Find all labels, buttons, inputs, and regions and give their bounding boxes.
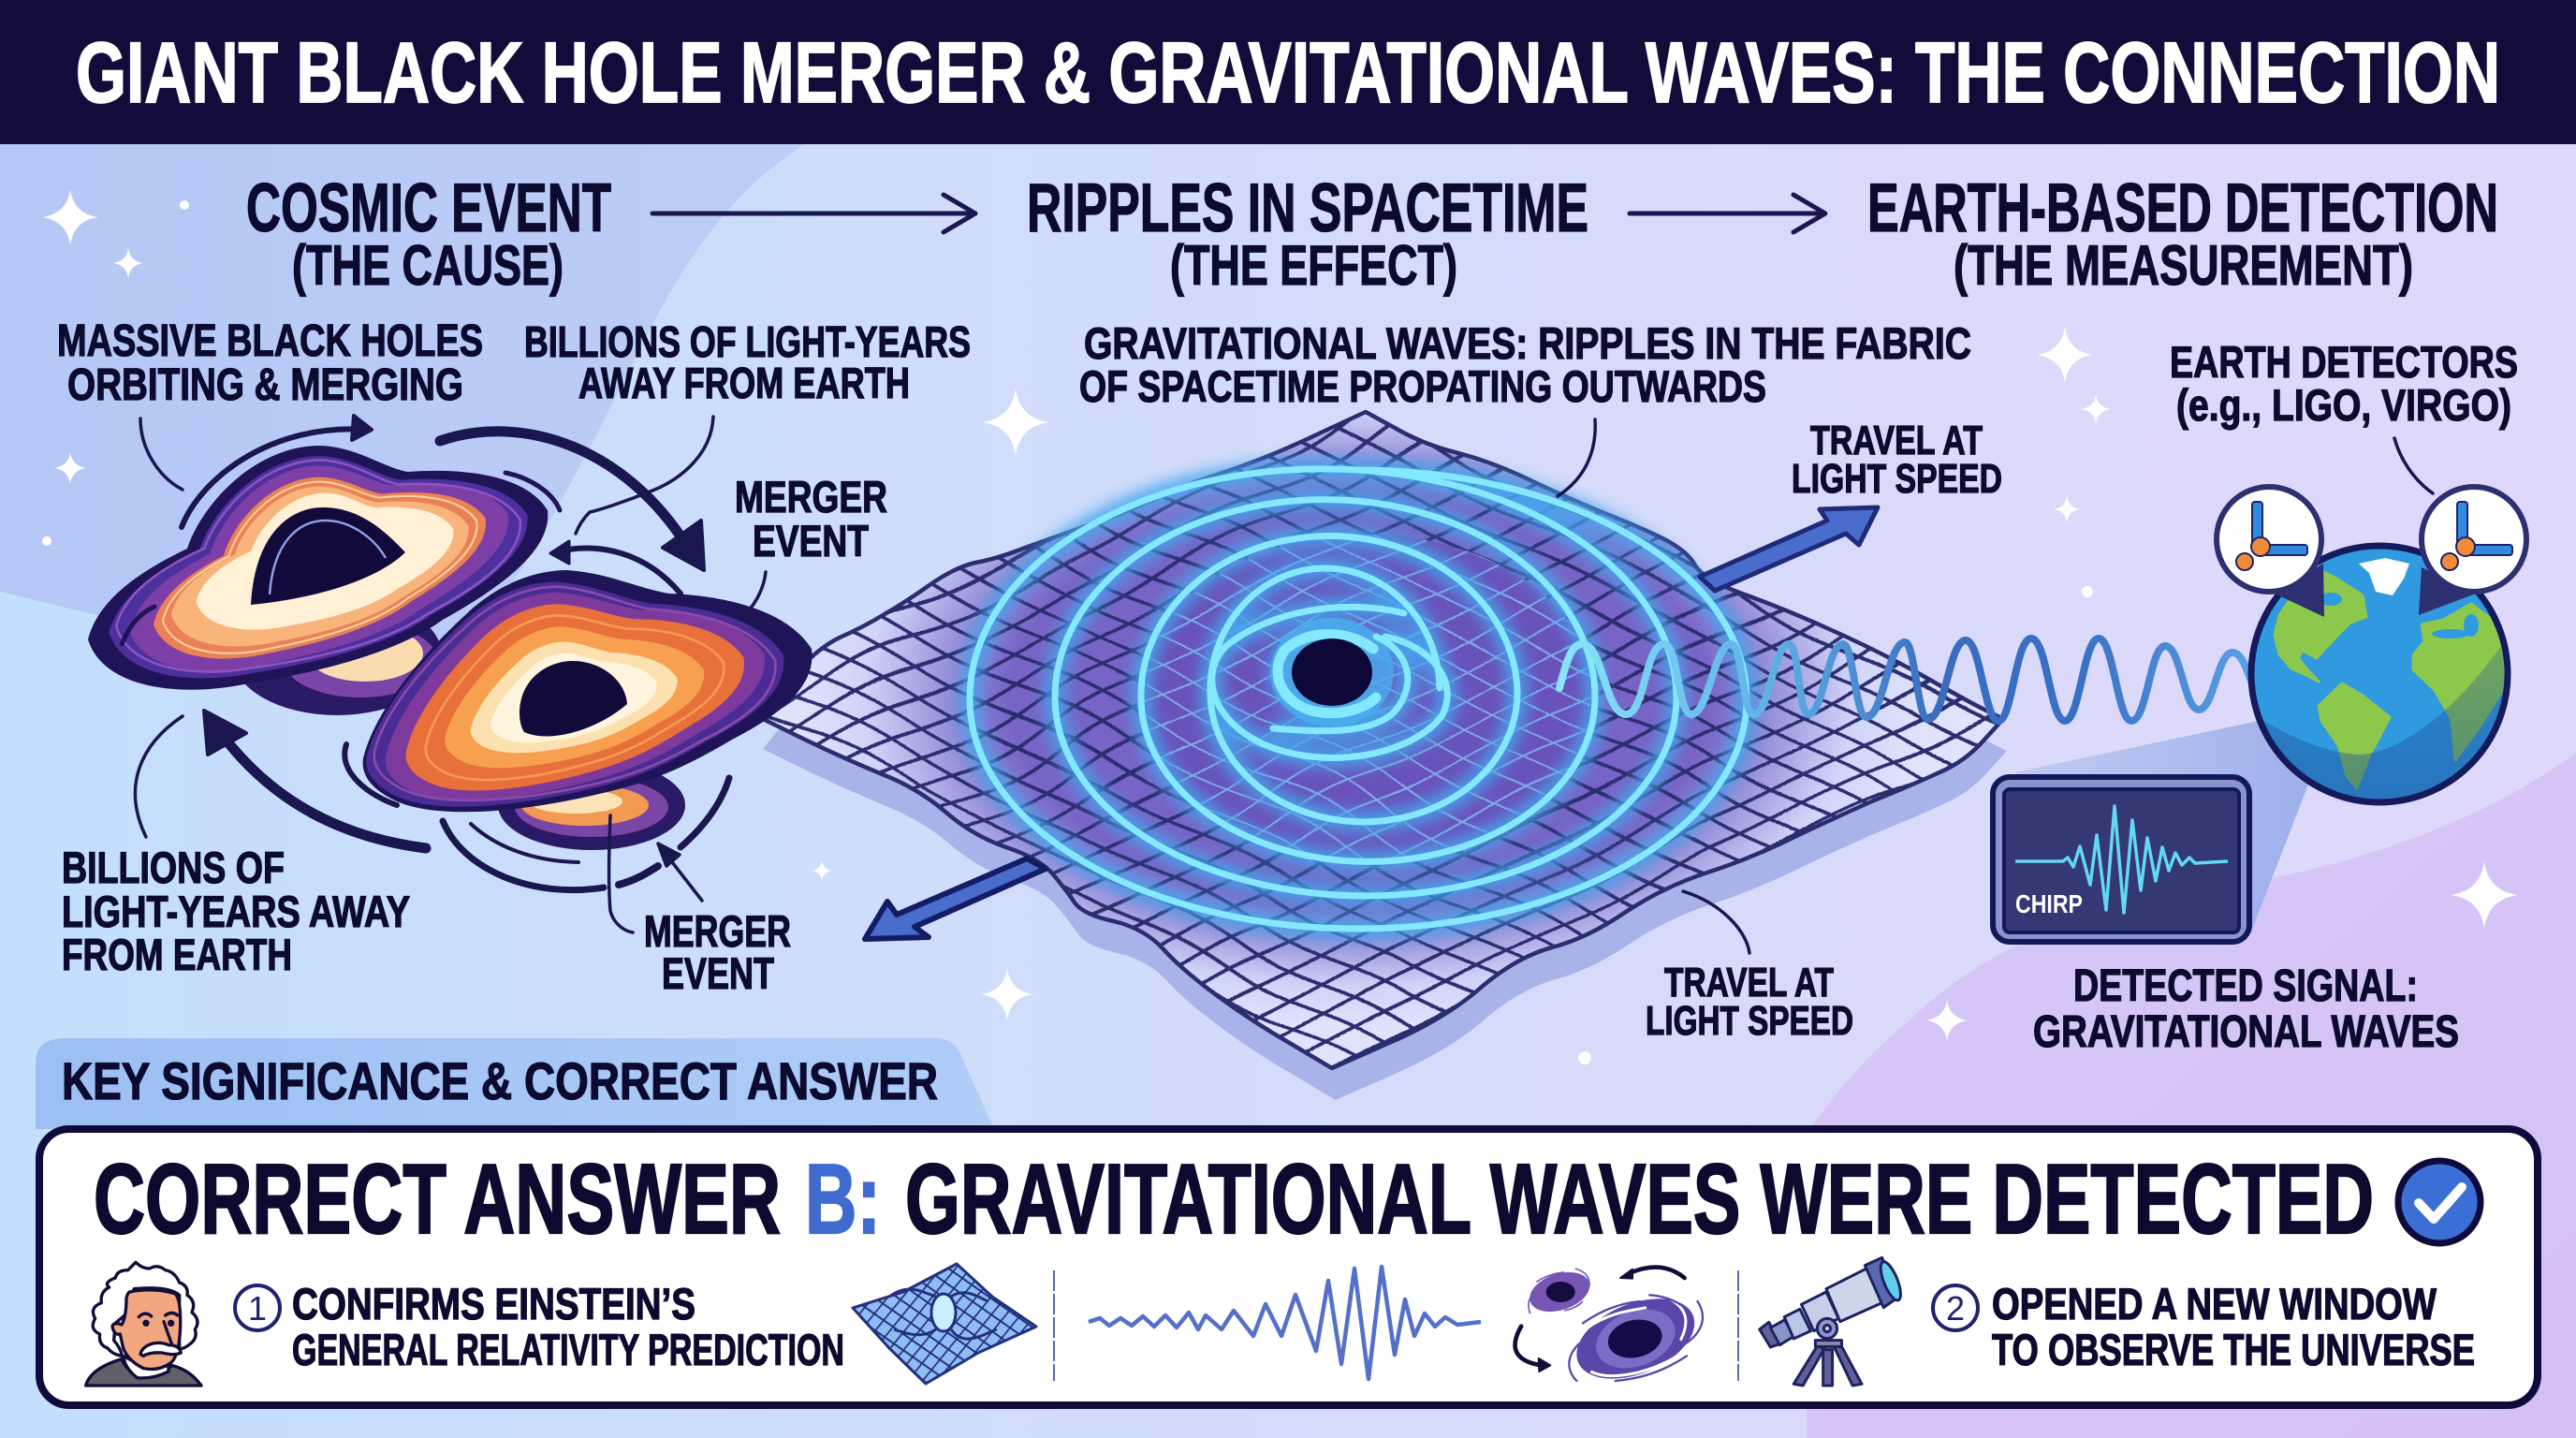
label: massive black holes: MASSIVE BLACK HOLES	[57, 316, 483, 366]
headline: correct answer	[94, 1144, 2374, 1255]
heading: cosmic event: COSMIC EVENT	[246, 170, 611, 246]
arrow: effect to measurement	[1630, 195, 1825, 232]
central black hole	[1292, 638, 1372, 706]
orbit arrows	[182, 416, 729, 890]
divider	[1053, 1270, 1055, 1381]
tab: key significance: KEY SIGNIFICANCE & CORRECT ANSWER	[62, 1051, 938, 1110]
spacetime grid with ripples	[763, 410, 2007, 1100]
number 1	[235, 1285, 280, 1330]
headline: correct answer: B:	[805, 1144, 881, 1255]
text: opened a new window	[1992, 1279, 2475, 1374]
label: billions of light-years lower: FROM EARTH	[62, 930, 292, 979]
black hole 2	[363, 570, 812, 850]
text: confirms einstein: GENERAL RELATIVITY PREDICTION	[292, 1325, 844, 1374]
label: travel at light speed lower	[1646, 960, 1853, 1044]
grid sheet	[768, 414, 1996, 1065]
landmasses	[2275, 571, 2507, 788]
heading: earth-based detection	[1867, 170, 2498, 297]
label: merger event lower	[644, 906, 791, 998]
label: gravitational waves description: GRAVITATIONAL WAVES: RIPPLES IN THE FABRIC	[1084, 318, 1971, 368]
detector icon right	[2422, 487, 2526, 592]
label: travel at light speed upper: TRAVEL AT	[1810, 418, 1983, 463]
monitor: chirp signal	[1993, 777, 2249, 942]
label: merger event lower: EVENT	[662, 948, 774, 998]
label: billions of light-years lower	[62, 843, 410, 979]
arrow: wave travelling down-left	[865, 858, 1046, 939]
divider	[1737, 1270, 1739, 1381]
monitor: chirp signal: CHIRP	[2015, 889, 2083, 918]
leader: earth detectors	[2394, 438, 2433, 493]
icon: telescope	[1760, 1257, 1905, 1386]
arrow: wave travelling up-right	[1700, 507, 1878, 591]
detector icon left	[2217, 487, 2321, 592]
icon: mini spacetime grid	[853, 1264, 1036, 1384]
icon: earth	[2251, 546, 2508, 802]
heading: ripples in spacetime	[1027, 170, 1588, 297]
label: merger event top: EVENT	[753, 516, 869, 565]
text: confirms einstein	[292, 1279, 844, 1374]
icon: check mark	[2398, 1161, 2481, 1243]
stars	[42, 189, 2518, 1064]
title	[0, 0, 2576, 144]
grid shadow	[763, 444, 2007, 1100]
light beam from earth to monitor	[2015, 721, 2308, 934]
icon: einstein	[86, 1262, 201, 1386]
label: merger event lower: MERGER	[644, 906, 791, 956]
arrow: cause to effect	[652, 195, 975, 232]
leader: gravitational waves	[1558, 419, 1595, 496]
callout leaders for the black holes	[135, 417, 766, 932]
number 1: 1	[248, 1289, 267, 1328]
label: travel at light speed upper: LIGHT SPEED	[1792, 456, 2002, 502]
label: massive black holes: ORBITING & MERGING	[67, 360, 463, 410]
label: earth detectors	[2170, 337, 2518, 430]
label: merger event top	[735, 472, 887, 565]
label: gravitational waves description: OF SPACETIME PROPATING OUTWARDS	[1079, 361, 1766, 411]
panel: correct answer	[39, 1129, 2538, 1405]
number 2	[1933, 1285, 1978, 1330]
label: gravitational waves description	[1079, 318, 1971, 411]
label: travel at light speed lower: LIGHT SPEED	[1646, 998, 1853, 1044]
earth night shade	[2258, 646, 2504, 801]
heading: ripples in spacetime: RIPPLES IN SPACETIME	[1027, 170, 1588, 246]
label: detected signal: GRAVITATIONAL WAVES	[2033, 1007, 2459, 1057]
leader: travel at light speed lower	[1683, 891, 1749, 953]
label: billions of light-years lower: BILLIONS OF	[62, 843, 285, 892]
gravitational wave signal	[1559, 638, 2252, 721]
detector pointer left	[2275, 564, 2324, 617]
icon: mini black holes	[1515, 1265, 1706, 1395]
label: detected signal: DETECTED SIGNAL:	[2073, 961, 2418, 1011]
label: merger event top: MERGER	[735, 472, 887, 521]
label: billions of light-years top	[524, 317, 971, 407]
detector pointer right	[2419, 567, 2476, 615]
number 2: 2	[1946, 1289, 1965, 1328]
heading: cosmic event	[246, 170, 611, 297]
tab: key significance	[36, 1038, 994, 1129]
label: detected signal	[2033, 961, 2459, 1057]
heading: earth-based detection: (THE MEASUREMENT)	[1954, 234, 2413, 297]
label: billions of light-years top: AWAY FROM EARTH	[578, 359, 910, 407]
label: earth detectors: (e.g., LIGO, VIRGO)	[2176, 380, 2511, 430]
headline: correct answer: CORRECT ANSWER	[94, 1144, 781, 1255]
text: opened a new window: OPENED A NEW WINDOW	[1992, 1279, 2437, 1328]
label: travel at light speed upper	[1792, 418, 2002, 502]
black hole pair	[88, 416, 812, 890]
black hole 1	[88, 446, 560, 715]
heading: cosmic event: (THE CAUSE)	[292, 234, 564, 297]
label: billions of light-years lower: LIGHT-YEARS AWAY	[62, 887, 410, 936]
heading: ripples in spacetime: (THE EFFECT)	[1170, 234, 1457, 297]
spiral ripples	[970, 469, 1747, 929]
icon: mini chirp wave	[1089, 1267, 1481, 1379]
text: confirms einstein: CONFIRMS EINSTEIN’S	[292, 1279, 695, 1328]
label: massive black holes	[57, 316, 483, 410]
label: travel at light speed lower: TRAVEL AT	[1664, 960, 1834, 1005]
label: billions of light-years top: BILLIONS OF LIGHT-YEARS	[524, 317, 971, 366]
